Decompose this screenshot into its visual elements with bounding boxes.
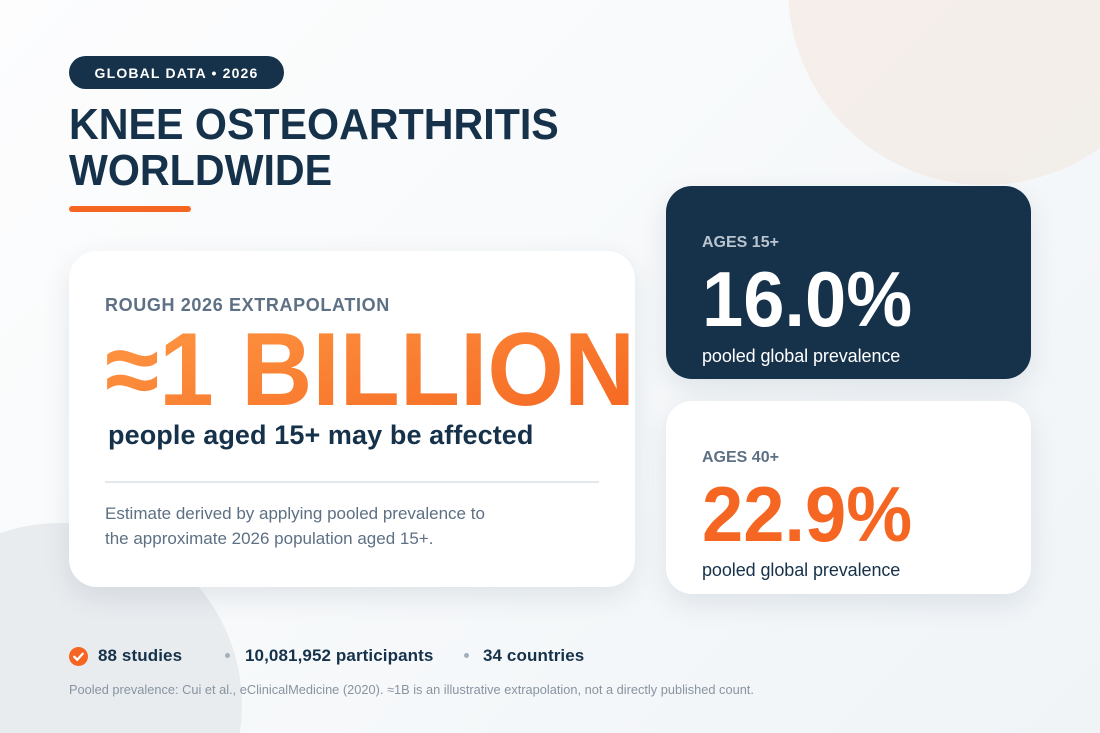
decorative circle: bottom left <box>0 523 242 733</box>
subheading: people aged 15+ may be affected <box>108 420 534 450</box>
label: ages 15+: AGES 15+ <box>702 234 779 251</box>
footnote: Pooled prevalence: Cui et al., eClinicalMedicine (2020). ≈1B is an illustrative extrapolation, not a directly published count. <box>69 682 754 697</box>
value: 16.0%: 16.0% <box>702 255 912 343</box>
separator dot <box>225 653 230 658</box>
caption: pooled global prevalence <box>702 346 900 366</box>
badge: global data <box>69 56 284 89</box>
badge: global data: GLOBAL DATA • 2026 <box>95 65 258 81</box>
decorative circle: top right <box>788 0 1100 185</box>
explanation text: Estimate derived by applying pooled prevalence to <box>105 504 485 523</box>
icon: check <box>69 647 88 666</box>
label: ages 40+: AGES 40+ <box>702 449 779 466</box>
big number: ≈1 BILLION <box>105 312 635 428</box>
label: rough extrapolation: ROUGH 2026 EXTRAPOLATION <box>105 295 390 315</box>
panel: ages 15+ <box>666 186 1031 379</box>
title: WORLDWIDE <box>69 146 332 194</box>
explanation text: the approximate 2026 population aged 15+. <box>105 529 433 548</box>
explanation text <box>105 504 485 548</box>
value: 22.9%: 22.9% <box>702 470 912 558</box>
stat: countries: 34 countries <box>483 646 584 665</box>
title: KNEE OSTEOARTHRITIS <box>69 101 559 149</box>
stat: studies: 88 studies <box>98 646 182 665</box>
panel: main estimate <box>69 251 635 587</box>
divider <box>105 481 599 483</box>
stat: participants: 10,081,952 participants <box>245 646 433 665</box>
title accent bar <box>69 206 191 212</box>
panel: ages 40+ <box>666 401 1031 594</box>
caption: pooled global prevalence <box>702 560 900 580</box>
separator dot <box>464 653 469 658</box>
title <box>69 101 559 194</box>
